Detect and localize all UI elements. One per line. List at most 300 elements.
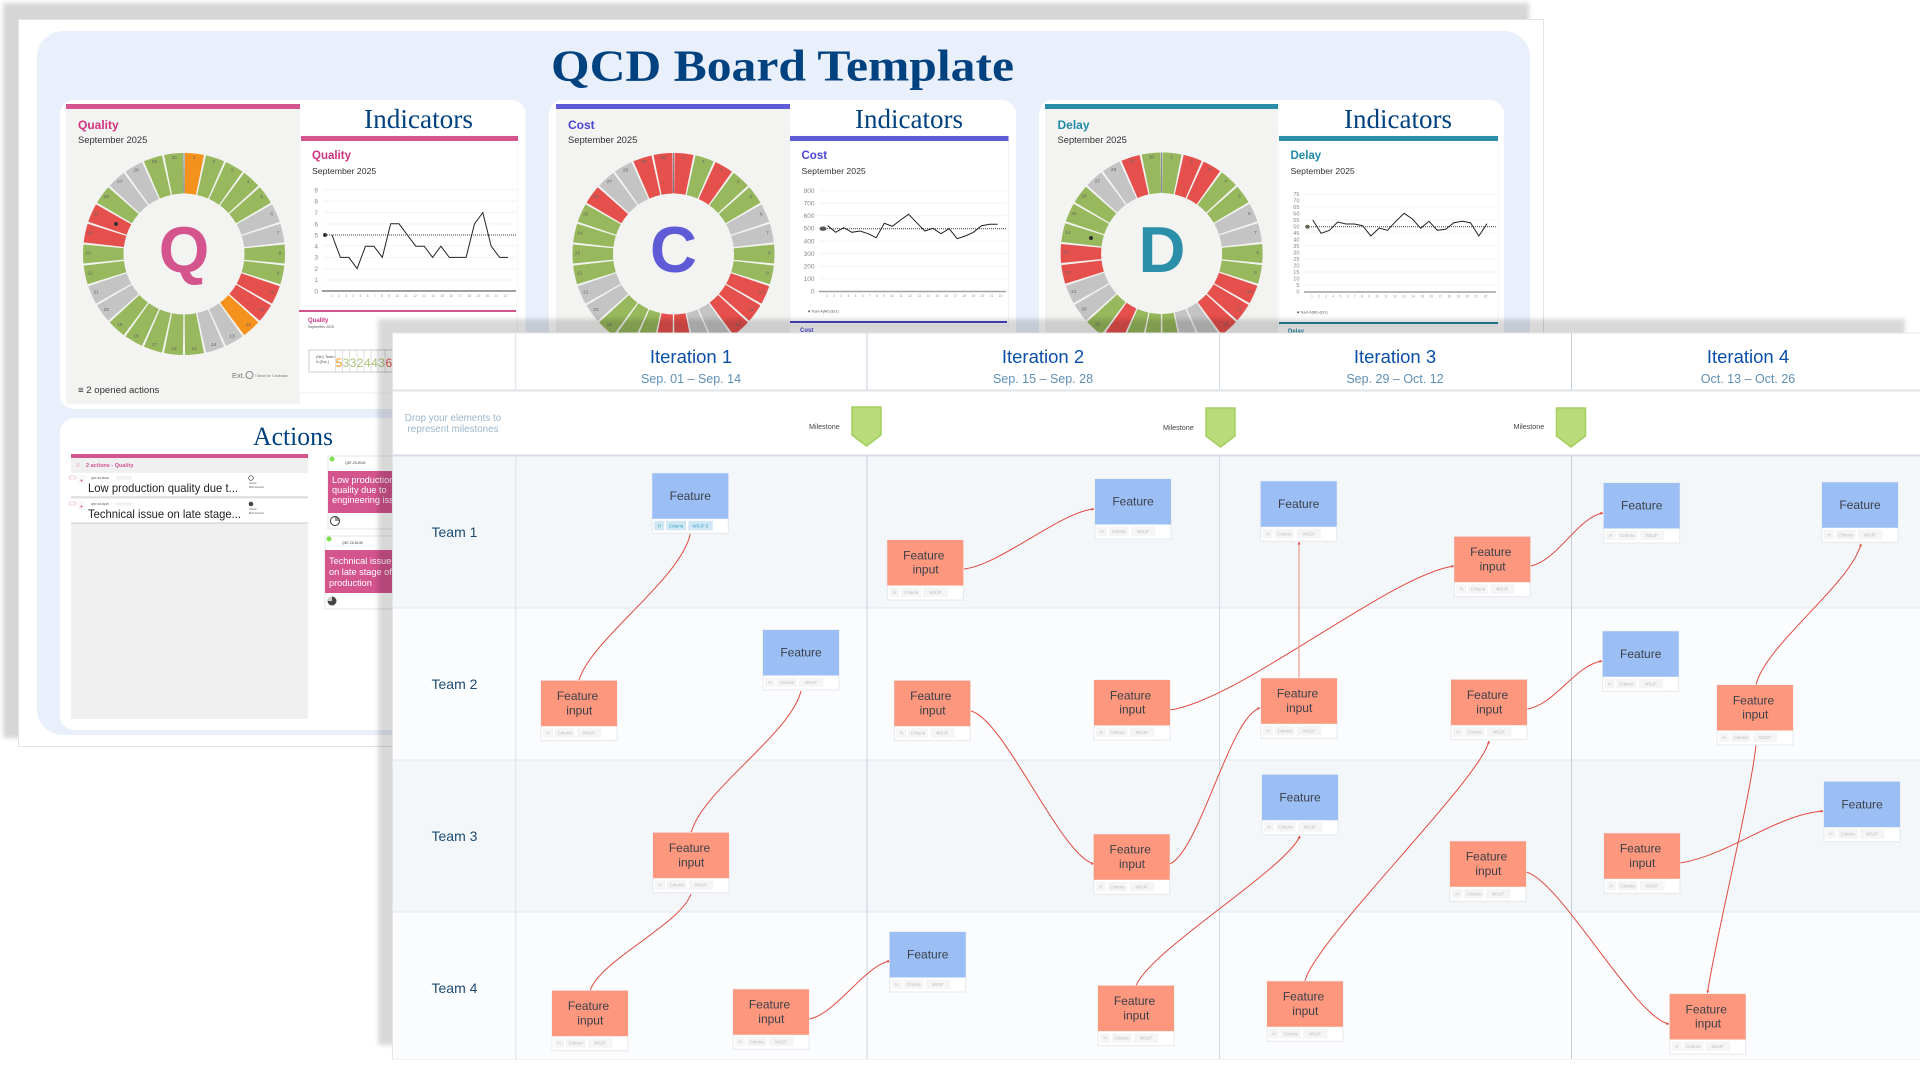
team 1 label: Team 1 bbox=[432, 524, 478, 540]
cost donut: 16 bbox=[661, 346, 666, 352]
input card 10: WSJF bbox=[1136, 884, 1148, 889]
delay chart card: 20 bbox=[1293, 264, 1300, 270]
cost chart card: September 2025 bbox=[802, 166, 866, 176]
feature card 2: Feature bbox=[780, 646, 822, 660]
cost chart card: Cost bbox=[800, 328, 813, 334]
quality summary table: 4 bbox=[364, 356, 371, 370]
indicators heading: Indicators bbox=[1344, 104, 1452, 134]
feature card 1: H bbox=[658, 523, 661, 528]
quality summary table: September 2025 bbox=[308, 325, 334, 329]
action row 2: Technical issue on late stage... bbox=[88, 507, 241, 521]
quality chart card: 4 bbox=[314, 244, 318, 250]
input card 9: H bbox=[658, 883, 662, 888]
feature card 5: H bbox=[1609, 533, 1612, 538]
feature card 1: Feature bbox=[670, 489, 711, 503]
cost chart card: 200 bbox=[804, 264, 815, 270]
cost donut: 30 bbox=[661, 155, 666, 161]
rear slide shadow bbox=[3, 3, 1529, 738]
feature card 5 bbox=[1604, 483, 1680, 543]
input card 14: WSJF bbox=[775, 1039, 787, 1044]
team row backgrounds bbox=[393, 333, 1920, 1059]
input card 1: Criteria bbox=[904, 590, 919, 595]
input card 12: Feature bbox=[1620, 842, 1662, 856]
input card 1: H bbox=[893, 590, 896, 595]
extension legend: Ext. bbox=[232, 371, 245, 380]
quality donut: 19 bbox=[117, 322, 123, 328]
feature card 2: H bbox=[768, 680, 772, 685]
quality donut: 20 bbox=[104, 307, 109, 313]
panel: delay bbox=[1039, 100, 1504, 409]
quality donut: 11 bbox=[259, 307, 264, 313]
input card 4: Feature bbox=[910, 689, 952, 703]
delay donut: 1 bbox=[1170, 155, 1173, 161]
input card 6: H bbox=[1266, 728, 1270, 733]
delay donut: 16 bbox=[1149, 345, 1155, 351]
feature card 3 bbox=[1095, 479, 1171, 539]
quality summary table: 5 bbox=[336, 356, 343, 370]
quality summary table: A (Est.) bbox=[316, 359, 330, 364]
input card 9: Feature bbox=[669, 841, 711, 855]
input card 6: Criteria bbox=[1277, 728, 1292, 733]
quality donut: 4 bbox=[247, 179, 250, 185]
dependency connectors bbox=[579, 509, 1861, 1024]
input card 17: Feature bbox=[1686, 1002, 1727, 1016]
quality summary table: Quality bbox=[308, 318, 329, 324]
delay donut: 26 bbox=[1081, 194, 1087, 200]
input card 1 bbox=[887, 540, 963, 600]
cost donut: 6 bbox=[760, 211, 763, 217]
cost donut: 28 bbox=[623, 167, 628, 173]
input card 16: Feature bbox=[1283, 990, 1325, 1004]
actions heading: Actions bbox=[253, 422, 333, 451]
cost donut: 23 bbox=[575, 250, 580, 256]
quality donut: 21 bbox=[94, 290, 99, 296]
delay chart card: 50 bbox=[1293, 224, 1300, 230]
input card 6: input bbox=[1286, 701, 1313, 715]
feature card 8: Feature bbox=[1279, 790, 1321, 804]
action list: 2 actions - Quality bbox=[86, 463, 134, 469]
quality donut: 9 bbox=[277, 270, 280, 276]
quality donut: 12 bbox=[246, 322, 251, 328]
delay donut: 22 bbox=[1065, 270, 1071, 276]
input card 3 bbox=[541, 681, 617, 741]
milestone 2 bbox=[1163, 408, 1235, 447]
cost chart card: 1 2 3 4 5 6 7 8 9 10 11 12 13 14 15 16 17 18 19 20 21 22 bbox=[826, 294, 1003, 298]
input card 2: Criteria bbox=[1471, 587, 1486, 592]
quality summary table: 3 bbox=[350, 356, 357, 370]
delay chart card: 65 bbox=[1293, 205, 1300, 211]
action card 2: on late stage of bbox=[329, 567, 392, 577]
delay donut: 17 bbox=[1129, 341, 1135, 347]
cost donut: 22 bbox=[577, 270, 583, 276]
input card 17 bbox=[1670, 994, 1746, 1054]
delay donut: 2 bbox=[1190, 159, 1193, 165]
quality summary table: 2 bbox=[357, 356, 364, 370]
panel: quality bbox=[60, 100, 526, 409]
delay donut: 15 bbox=[1169, 345, 1175, 351]
feature card 1: Criteria bbox=[669, 523, 684, 528]
input card 9 bbox=[653, 833, 729, 893]
feature card 9: Criteria bbox=[1840, 832, 1855, 837]
input card 15: WSJF bbox=[1140, 1036, 1152, 1041]
action row 1: Low production quality due t... bbox=[88, 481, 238, 495]
delay chart card: ■ Team A(Nb) (Est.) bbox=[1297, 310, 1328, 314]
feature card 10: WSJF bbox=[932, 982, 944, 987]
input card 15 bbox=[1098, 986, 1174, 1046]
iteration 3 header: Sep. 29 – Oct. 12 bbox=[1346, 372, 1444, 386]
input card 3: H bbox=[546, 731, 550, 736]
feature card 9: Feature bbox=[1841, 797, 1883, 811]
cost donut bbox=[571, 151, 776, 357]
feature card 9: WSJF bbox=[1866, 832, 1878, 837]
input card 12: WSJF bbox=[1646, 883, 1658, 888]
cost donut: 8 bbox=[768, 250, 771, 256]
feature card 4: Criteria bbox=[1277, 531, 1292, 536]
delay donut: 28 bbox=[1111, 167, 1117, 173]
quality chart card: 9 bbox=[314, 188, 318, 194]
action card 1: Q87-25-8040 bbox=[345, 461, 366, 465]
action card 2: Technical issue bbox=[329, 556, 391, 566]
action list: ≡ bbox=[76, 463, 80, 469]
input card 10: H bbox=[1099, 884, 1102, 889]
input card 16: Criteria bbox=[1283, 1031, 1298, 1036]
input card 4: H bbox=[900, 731, 903, 736]
input card 17: Criteria bbox=[1686, 1044, 1701, 1049]
input card 17: input bbox=[1695, 1017, 1722, 1031]
quality chart card: 0 bbox=[314, 288, 318, 296]
delay chart card: 40 bbox=[1293, 238, 1300, 244]
feature card 3: Feature bbox=[1112, 495, 1154, 509]
delay donut: 13 bbox=[1207, 333, 1213, 339]
input card 9: input bbox=[678, 855, 705, 869]
feature card 8: H bbox=[1267, 825, 1271, 830]
feature card 8 bbox=[1262, 775, 1338, 835]
delay donut: 27 bbox=[1095, 179, 1100, 185]
delay chart card: 1 2 3 4 5 6 7 8 9 10 11 12 13 14 15 16 17 18 19 20 21 22 bbox=[1311, 294, 1488, 298]
input card 8: Criteria bbox=[1733, 735, 1748, 740]
input card 11: Feature bbox=[1466, 850, 1508, 864]
cost donut: 21 bbox=[583, 290, 589, 296]
quality donut: 23 bbox=[85, 250, 91, 256]
input card 7: Criteria bbox=[1467, 730, 1482, 735]
input card 8: WSJF bbox=[1759, 735, 1771, 740]
iteration 1 header bbox=[641, 346, 741, 386]
feature card 6 bbox=[1822, 482, 1898, 542]
input card 14: Feature bbox=[749, 998, 791, 1012]
title: QCD Board Template bbox=[551, 42, 1014, 90]
action row 1: Brett Durand bbox=[249, 485, 264, 489]
input card 7: input bbox=[1476, 702, 1503, 716]
quality wheel card bbox=[66, 104, 300, 404]
quality chart card: 1 2 3 4 5 6 7 8 9 10 11 12 13 14 15 16 17 18 19 20 21 22 bbox=[331, 294, 508, 298]
input card 4: WSJF bbox=[936, 731, 949, 736]
cost donut: 10 bbox=[759, 290, 764, 296]
quality chart card: Quality bbox=[312, 150, 352, 162]
milestone hint bbox=[405, 413, 502, 435]
delay donut: 25 bbox=[1071, 211, 1077, 217]
cost donut: 4 bbox=[736, 179, 739, 185]
input card 15: H bbox=[1103, 1036, 1107, 1041]
input card 11: WSJF bbox=[1492, 891, 1504, 896]
quality donut: 22 bbox=[87, 270, 93, 276]
delay chart card: 45 bbox=[1293, 231, 1300, 237]
input card 4 bbox=[894, 681, 970, 741]
input card 4: Criteria bbox=[911, 731, 926, 736]
quality donut: 17 bbox=[152, 342, 157, 348]
quality donut: 28 bbox=[133, 167, 139, 173]
delay donut bbox=[1059, 151, 1264, 356]
delay chart card: Delay bbox=[1290, 150, 1322, 162]
feature card 7: Feature bbox=[1620, 647, 1662, 661]
slide: QCD board bbox=[18, 20, 1544, 746]
feature card 2 bbox=[763, 630, 839, 690]
delay chart card: 55 bbox=[1293, 218, 1300, 224]
feature card 7: Criteria bbox=[1619, 681, 1634, 686]
action row 1: Q87-25-8040 bbox=[91, 476, 109, 480]
quality chart card: 7 bbox=[314, 210, 318, 217]
quality chart card: 5 bbox=[314, 232, 318, 240]
indicators heading: Indicators bbox=[855, 104, 963, 134]
delay donut: 9 bbox=[1254, 270, 1257, 276]
input card 6: WSJF bbox=[1303, 728, 1315, 733]
quality summary table: 3 bbox=[343, 356, 350, 370]
input card 12: Criteria bbox=[1620, 883, 1635, 888]
quality wheel card: Quality bbox=[78, 118, 119, 132]
quality chart card: September 2025 bbox=[312, 166, 376, 176]
quality donut: 29 bbox=[152, 159, 157, 165]
input card 8 bbox=[1717, 685, 1793, 745]
delay chart card: 75 bbox=[1293, 192, 1300, 198]
quality chart card: 6 bbox=[314, 222, 318, 228]
input card 13: Criteria bbox=[568, 1041, 583, 1046]
feature card 3: WSJF bbox=[1137, 529, 1149, 534]
input card 7: Feature bbox=[1467, 688, 1509, 702]
delay chart card: September 2025 bbox=[1290, 166, 1355, 176]
delay chart card: 0 bbox=[1296, 290, 1300, 296]
cost chart card: 500 bbox=[804, 226, 815, 232]
input card 4: input bbox=[920, 703, 946, 717]
cost donut: 11 bbox=[749, 307, 754, 313]
quality donut: 2 bbox=[212, 159, 215, 165]
action row 2: Brett Durand bbox=[249, 511, 264, 515]
input card 3: input bbox=[566, 703, 593, 717]
delay donut: 8 bbox=[1256, 250, 1259, 256]
cost donut: 29 bbox=[641, 159, 647, 165]
delay donut: 7 bbox=[1254, 230, 1257, 236]
input card 5: H bbox=[1099, 730, 1103, 735]
cost chart card: 700 bbox=[804, 200, 815, 208]
action card 1: Low production bbox=[332, 475, 394, 485]
quality summary table: 4 bbox=[371, 356, 378, 370]
opened actions note: ≡ 2 opened actions bbox=[78, 385, 160, 396]
feature card 4: Feature bbox=[1278, 497, 1320, 511]
quality donut: 24 bbox=[87, 231, 93, 237]
input card 10 bbox=[1094, 834, 1170, 894]
quality donut: 10 bbox=[269, 290, 275, 296]
cost chart card: 0 bbox=[811, 288, 815, 296]
action card 2: production bbox=[329, 578, 372, 588]
input card 14: input bbox=[758, 1012, 785, 1026]
input card 6: Feature bbox=[1277, 687, 1319, 701]
feature card 6: WSJF bbox=[1864, 532, 1876, 537]
input card 11 bbox=[1450, 841, 1526, 901]
delay donut: 24 bbox=[1065, 230, 1071, 236]
feature card 2: Criteria bbox=[779, 680, 794, 685]
input card 8: Feature bbox=[1733, 693, 1775, 707]
quality summary table bbox=[299, 310, 517, 393]
input card 13: WSJF bbox=[594, 1041, 606, 1046]
cost donut: 19 bbox=[607, 322, 612, 328]
action row 1: Owner bbox=[249, 481, 257, 485]
letter Q: Q bbox=[159, 213, 209, 286]
team 4 label: Team 4 bbox=[432, 980, 478, 996]
delay chart card: Delay bbox=[1288, 329, 1305, 335]
feature card 6: H bbox=[1827, 532, 1831, 537]
action card 1: quality due to bbox=[332, 485, 387, 495]
input card 9: Criteria bbox=[669, 883, 684, 888]
quality donut: 7 bbox=[277, 231, 280, 237]
quality donut: 14 bbox=[211, 342, 217, 348]
input card 16: H bbox=[1272, 1031, 1276, 1036]
feature card 9: H bbox=[1829, 832, 1833, 837]
quality donut: 5 bbox=[260, 194, 263, 200]
feature card 7: WSJF bbox=[1645, 681, 1657, 686]
program board bbox=[392, 333, 1920, 1059]
input card 10: input bbox=[1119, 857, 1146, 871]
input card 3: Feature bbox=[557, 689, 599, 703]
input card 12: H bbox=[1609, 883, 1613, 888]
milestone hint: represent milestones bbox=[408, 424, 499, 435]
letter C: C bbox=[650, 213, 697, 286]
action list bbox=[69, 454, 308, 719]
quality donut: 18 bbox=[133, 334, 139, 340]
input card 5: input bbox=[1119, 703, 1146, 717]
feature card 2: WSJF bbox=[805, 680, 817, 685]
input card 15: input bbox=[1123, 1008, 1150, 1022]
feature card 4: WSJF bbox=[1303, 531, 1315, 536]
input card 15: Feature bbox=[1114, 994, 1156, 1008]
input card 7: H bbox=[1456, 730, 1460, 735]
quality donut: 16 bbox=[171, 346, 177, 352]
iteration 2 header bbox=[993, 346, 1093, 386]
cost donut: 2 bbox=[702, 159, 705, 165]
input card 16: input bbox=[1292, 1004, 1319, 1018]
input card 13 bbox=[552, 991, 628, 1051]
delay chart card: 70 bbox=[1293, 198, 1300, 204]
letter D: D bbox=[1139, 213, 1185, 286]
feature card 5: Feature bbox=[1621, 499, 1663, 513]
iteration 4 header bbox=[1701, 346, 1795, 386]
delay donut: 10 bbox=[1247, 289, 1252, 295]
input card 5: Feature bbox=[1110, 688, 1152, 702]
quality summary table: 6 bbox=[385, 356, 392, 370]
delay donut: 5 bbox=[1238, 194, 1241, 200]
cost chart card: Cost bbox=[802, 150, 827, 162]
milestone 1: Milestone bbox=[809, 422, 840, 431]
feature card 3: Criteria bbox=[1111, 529, 1126, 534]
input card 8: input bbox=[1742, 708, 1769, 722]
cost donut: 17 bbox=[641, 342, 647, 348]
iteration 4 header: Iteration 4 bbox=[1707, 346, 1789, 367]
delay donut: 23 bbox=[1063, 250, 1069, 256]
input card 3: WSJF bbox=[583, 731, 595, 736]
feature card 8: WSJF bbox=[1304, 825, 1316, 830]
feature card 3: H bbox=[1100, 529, 1104, 534]
delay donut: 30 bbox=[1149, 155, 1155, 161]
cost chart card: 400 bbox=[804, 238, 815, 246]
feature card 7: H bbox=[1608, 681, 1611, 686]
quality donut bbox=[81, 151, 287, 357]
input card 5: WSJF bbox=[1136, 730, 1148, 735]
quality donut: 30 bbox=[171, 155, 177, 161]
quality chart card: 3 bbox=[314, 254, 318, 262]
light blue board background bbox=[37, 31, 1530, 735]
feature card 4: H bbox=[1266, 531, 1269, 536]
delay donut: 14 bbox=[1189, 341, 1194, 347]
team 3 label: Team 3 bbox=[432, 828, 478, 844]
delay donut: 3 bbox=[1208, 167, 1211, 173]
cost donut: 24 bbox=[577, 231, 583, 237]
feature card 9 bbox=[1824, 782, 1900, 842]
cost donut: 27 bbox=[607, 179, 612, 185]
action card 2: Q87-25-8145 bbox=[342, 541, 363, 545]
input card 6 bbox=[1261, 678, 1337, 738]
quality donut: 1 bbox=[193, 155, 196, 161]
input card 1: WSJF bbox=[929, 590, 942, 595]
action card 1 bbox=[328, 456, 418, 529]
cost donut: 3 bbox=[720, 167, 723, 173]
delay donut: 11 bbox=[1237, 306, 1242, 312]
input card 13: Feature bbox=[568, 999, 610, 1013]
input card 16 bbox=[1267, 981, 1343, 1041]
milestone 2: Milestone bbox=[1163, 423, 1194, 432]
feature card 6: Criteria bbox=[1838, 532, 1853, 537]
input card 5 bbox=[1094, 680, 1170, 740]
action row 2: Owner bbox=[249, 507, 257, 511]
quality donut: 15 bbox=[191, 346, 197, 352]
input card 16: WSJF bbox=[1309, 1031, 1321, 1036]
delay donut: 29 bbox=[1129, 159, 1135, 165]
quality summary table: (Nb) Team bbox=[316, 354, 335, 359]
input card 13: input bbox=[577, 1013, 604, 1027]
iteration 1 header: Sep. 01 – Sep. 14 bbox=[641, 372, 741, 386]
delay chart card bbox=[1279, 136, 1498, 335]
delay wheel card bbox=[1045, 104, 1278, 404]
quality donut: 13 bbox=[229, 334, 235, 340]
input card 14: H bbox=[738, 1039, 742, 1044]
input card 12 bbox=[1604, 833, 1680, 893]
extension legend: / Mean for 1 indicator bbox=[255, 374, 289, 378]
quality donut: 27 bbox=[117, 179, 123, 185]
iteration 2 header: Sep. 15 – Sep. 28 bbox=[993, 372, 1093, 386]
input card 1: input bbox=[913, 563, 939, 577]
input card 14 bbox=[733, 989, 809, 1049]
delay chart card: 5 bbox=[1296, 283, 1300, 289]
delay chart card: 10 bbox=[1293, 276, 1300, 282]
quality donut: 26 bbox=[104, 194, 109, 200]
delay donut: 12 bbox=[1223, 321, 1229, 327]
delay chart card: 35 bbox=[1293, 244, 1300, 250]
team 2 label: Team 2 bbox=[432, 676, 478, 692]
action row 2 bbox=[69, 499, 308, 524]
feature card 4 bbox=[1261, 481, 1337, 541]
cost chart card: 600 bbox=[804, 213, 815, 220]
input card 10: Feature bbox=[1110, 843, 1151, 857]
iteration 3 header bbox=[1346, 346, 1444, 386]
quality chart card: 8 bbox=[314, 198, 318, 206]
delay donut: 18 bbox=[1111, 333, 1117, 339]
cost chart card bbox=[790, 136, 1008, 334]
